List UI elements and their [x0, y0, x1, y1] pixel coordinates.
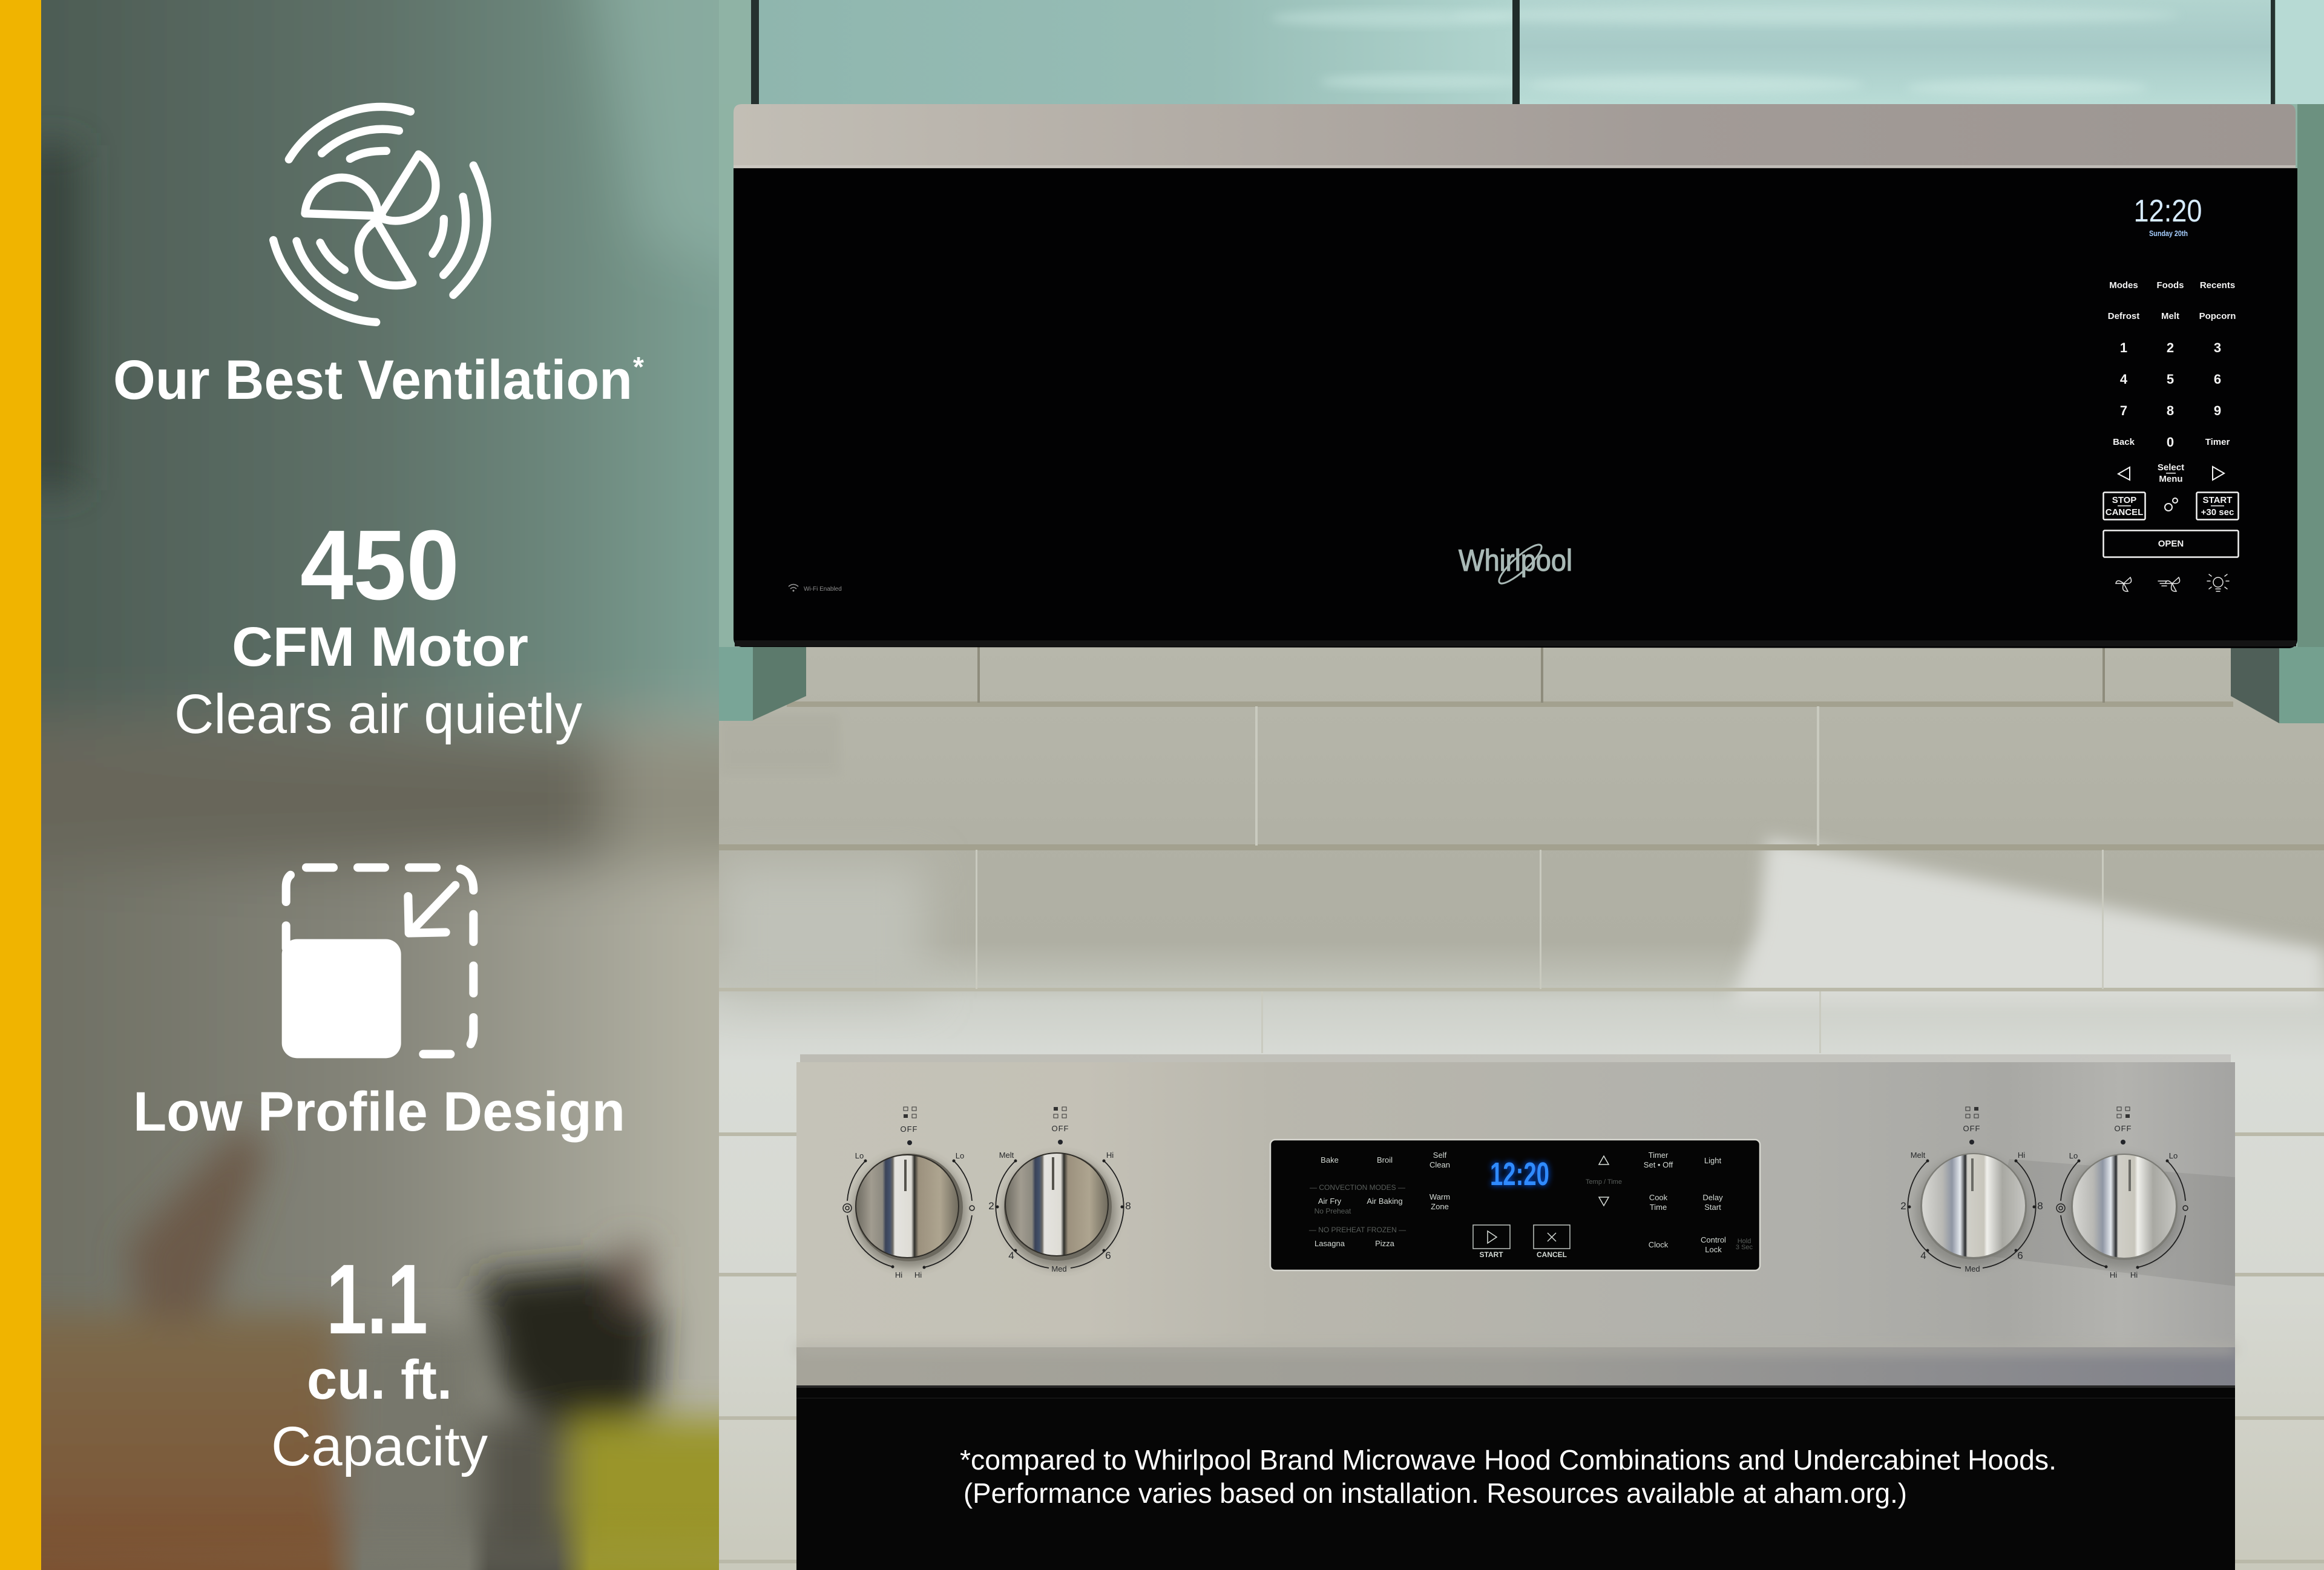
electric range — [796, 1054, 2235, 1570]
microwave keypad: 0 — [2167, 435, 2174, 450]
panel: blurred left background — [41, 0, 719, 1570]
knob 3: 4 — [1920, 1250, 1926, 1261]
microwave keypad: 1 — [2120, 340, 2127, 355]
microwave keypad: 9 — [2214, 403, 2221, 418]
range control panel: Air Fry — [1318, 1197, 1342, 1206]
microwave keypad: Popcorn — [2199, 311, 2236, 321]
microwave keypad: Foods — [2157, 280, 2184, 291]
knob 3: 2 — [1900, 1200, 1906, 1212]
knob 3: Med — [1965, 1264, 1980, 1273]
knob 4: Hi — [2110, 1270, 2117, 1279]
microwave keypad: 6 — [2214, 372, 2221, 387]
knob 3: Hi — [2018, 1151, 2025, 1160]
footnote: *compared to Whirlpool Brand Microwave Hood Combinations and Undercabinet Hoods. — [960, 1444, 2056, 1476]
range control panel: Control — [1701, 1235, 1726, 1244]
microwave fan and light icons — [2116, 574, 2229, 591]
stat: 1.1 cu. ft. capacity: cu. ft. — [307, 1349, 452, 1411]
range top ledge — [800, 1054, 2231, 1063]
microwave keypad: 3 — [2214, 340, 2221, 355]
stat: 450 CFM motor: Clears air quietly — [174, 683, 582, 745]
range control panel: Cook — [1649, 1193, 1668, 1202]
black oven door — [796, 1385, 2235, 1570]
blue digital clock: 12:20 — [1490, 1156, 1549, 1192]
range control panel: CANCEL — [1537, 1250, 1567, 1259]
knob 2: 6 — [1105, 1250, 1111, 1261]
range control panel: START — [1479, 1250, 1503, 1259]
range control panel: — NO PREHEAT FROZEN — — [1309, 1226, 1406, 1234]
microwave keypad — [2104, 280, 2238, 557]
microwave keypad: START — [2203, 495, 2232, 505]
range control panel: Delay — [1702, 1193, 1723, 1202]
knob 3: Melt — [1911, 1151, 1926, 1160]
knob 4: Hi — [2130, 1270, 2138, 1279]
Wi-Fi enabled indicator — [789, 585, 842, 593]
microwave hood — [734, 104, 2297, 648]
microwave display clock: Sunday 20th — [2149, 229, 2188, 238]
microwave keypad: OPEN — [2158, 539, 2184, 549]
range control panel: 3 Sec — [1736, 1244, 1753, 1251]
range control panel: Clean — [1430, 1160, 1450, 1169]
heading: low profile design: Low Profile Design — [133, 1081, 625, 1143]
microwave keypad: 2 — [2167, 340, 2174, 355]
shadow across right knobs — [1985, 1159, 2235, 1286]
knob 4: OFF — [2115, 1124, 2132, 1133]
range control panel: Time — [1650, 1203, 1667, 1212]
microwave keypad: Select — [2158, 462, 2184, 473]
range control panel: Warm — [1430, 1192, 1450, 1201]
microwave keypad: Recents — [2200, 280, 2235, 291]
stat: 1.1 cu. ft. capacity — [271, 1244, 488, 1477]
microwave keypad: 4 — [2120, 372, 2128, 387]
microwave keypad: Menu — [2159, 474, 2183, 484]
teal wall tiles — [719, 0, 2324, 647]
knob 3: 6 — [2017, 1250, 2023, 1261]
range control panel: Temp / Time — [1586, 1178, 1622, 1186]
white subway tile wall — [719, 647, 2324, 1570]
knob 1: Lo — [956, 1151, 964, 1160]
range control panel: Timer — [1649, 1151, 1669, 1160]
microwave keypad: Timer — [2205, 437, 2230, 447]
stainless steel top band — [734, 104, 2296, 168]
blue digital clock: 12:20 — [1490, 1156, 1549, 1192]
footnote — [960, 1444, 2056, 1509]
knob 1: OFF — [901, 1125, 917, 1134]
knob 1: Hi — [895, 1270, 902, 1279]
footnote: (Performance varies based on installation. Resources available at aham.org.) — [963, 1477, 1907, 1509]
icon: low profile resize — [282, 867, 473, 1058]
Wi-Fi enabled indicator: Wi-Fi Enabled — [804, 586, 842, 593]
knob 2: OFF — [1052, 1124, 1069, 1133]
range control panel: Zone — [1431, 1202, 1449, 1211]
knob 1: Lo — [855, 1151, 864, 1160]
microwave keypad: Modes — [2109, 280, 2138, 291]
Whirlpool logo — [1459, 540, 1572, 588]
knob 2: Hi — [1106, 1151, 1114, 1160]
range control panel: Air Baking — [1367, 1197, 1403, 1206]
knob 1: Hi — [914, 1270, 922, 1279]
knob 2: 4 — [1008, 1250, 1014, 1261]
knob 4: Lo — [2069, 1151, 2078, 1160]
icon: ventilation fan — [274, 107, 487, 322]
heading: our best ventilation: Our Best Ventilation — [113, 349, 632, 411]
stat: 450 CFM motor: CFM Motor — [232, 616, 528, 678]
stat: 450 CFM motor — [174, 510, 582, 745]
microwave keypad: 7 — [2120, 403, 2127, 418]
stat: 1.1 cu. ft. capacity: Capacity — [271, 1416, 488, 1477]
microwave keypad: +30 sec — [2201, 507, 2234, 517]
range control panel: — CONVECTION MODES — — [1310, 1183, 1405, 1192]
black door panel — [734, 168, 2297, 648]
knob 2: 8 — [1125, 1200, 1131, 1212]
microwave keypad: CANCEL — [2106, 507, 2143, 517]
photo background: kitchen wall — [719, 0, 2324, 1570]
range control panel: Set • Off — [1644, 1160, 1673, 1169]
stainless control console — [796, 1062, 2235, 1386]
yellow accent bar — [0, 0, 41, 1570]
microwave keypad: STOP — [2112, 495, 2136, 505]
range control panel: Lasagna — [1315, 1239, 1345, 1248]
microwave keypad: 5 — [2167, 372, 2174, 387]
microwave keypad: 8 — [2167, 403, 2174, 418]
knob 2: Melt — [999, 1151, 1014, 1160]
knob 3 — [1900, 1107, 2043, 1273]
stat: 1.1 cu. ft. capacity: 1.1 — [326, 1244, 428, 1355]
range control panel: Hold — [1738, 1238, 1751, 1245]
range control panel: Start — [1704, 1203, 1721, 1212]
knob 2 — [988, 1107, 1131, 1273]
range control panel: Clock — [1649, 1240, 1669, 1249]
range control panel: Broil — [1377, 1155, 1393, 1164]
knob 4: Lo — [2169, 1151, 2178, 1160]
range control panel: No Preheat — [1315, 1207, 1351, 1215]
range control panel: Pizza — [1375, 1239, 1395, 1248]
knob 3: OFF — [1963, 1124, 1980, 1133]
cabinet side brackets — [719, 647, 2324, 723]
range control panel: Lock — [1705, 1245, 1722, 1254]
range control panel: Light — [1704, 1156, 1721, 1165]
microwave keypad: Back — [2113, 437, 2135, 447]
range control panel: Bake — [1321, 1155, 1339, 1164]
knob 1 — [843, 1107, 974, 1279]
knob 2: Med — [1051, 1264, 1067, 1273]
microwave keypad: Defrost — [2108, 311, 2139, 321]
microwave keypad: Melt — [2161, 311, 2179, 321]
microwave display clock: 12:20 — [2134, 194, 2202, 229]
stat: 450 CFM motor: 450 — [300, 510, 459, 620]
knob 3: 8 — [2037, 1200, 2043, 1212]
range control panel — [1270, 1140, 1760, 1270]
range control panel: Self — [1433, 1151, 1447, 1160]
heading: our best ventilation: * — [633, 351, 644, 383]
Whirlpool logo: Whirlpool — [1459, 544, 1572, 577]
knob 2: 2 — [988, 1200, 994, 1212]
knob 4 — [2056, 1107, 2188, 1279]
